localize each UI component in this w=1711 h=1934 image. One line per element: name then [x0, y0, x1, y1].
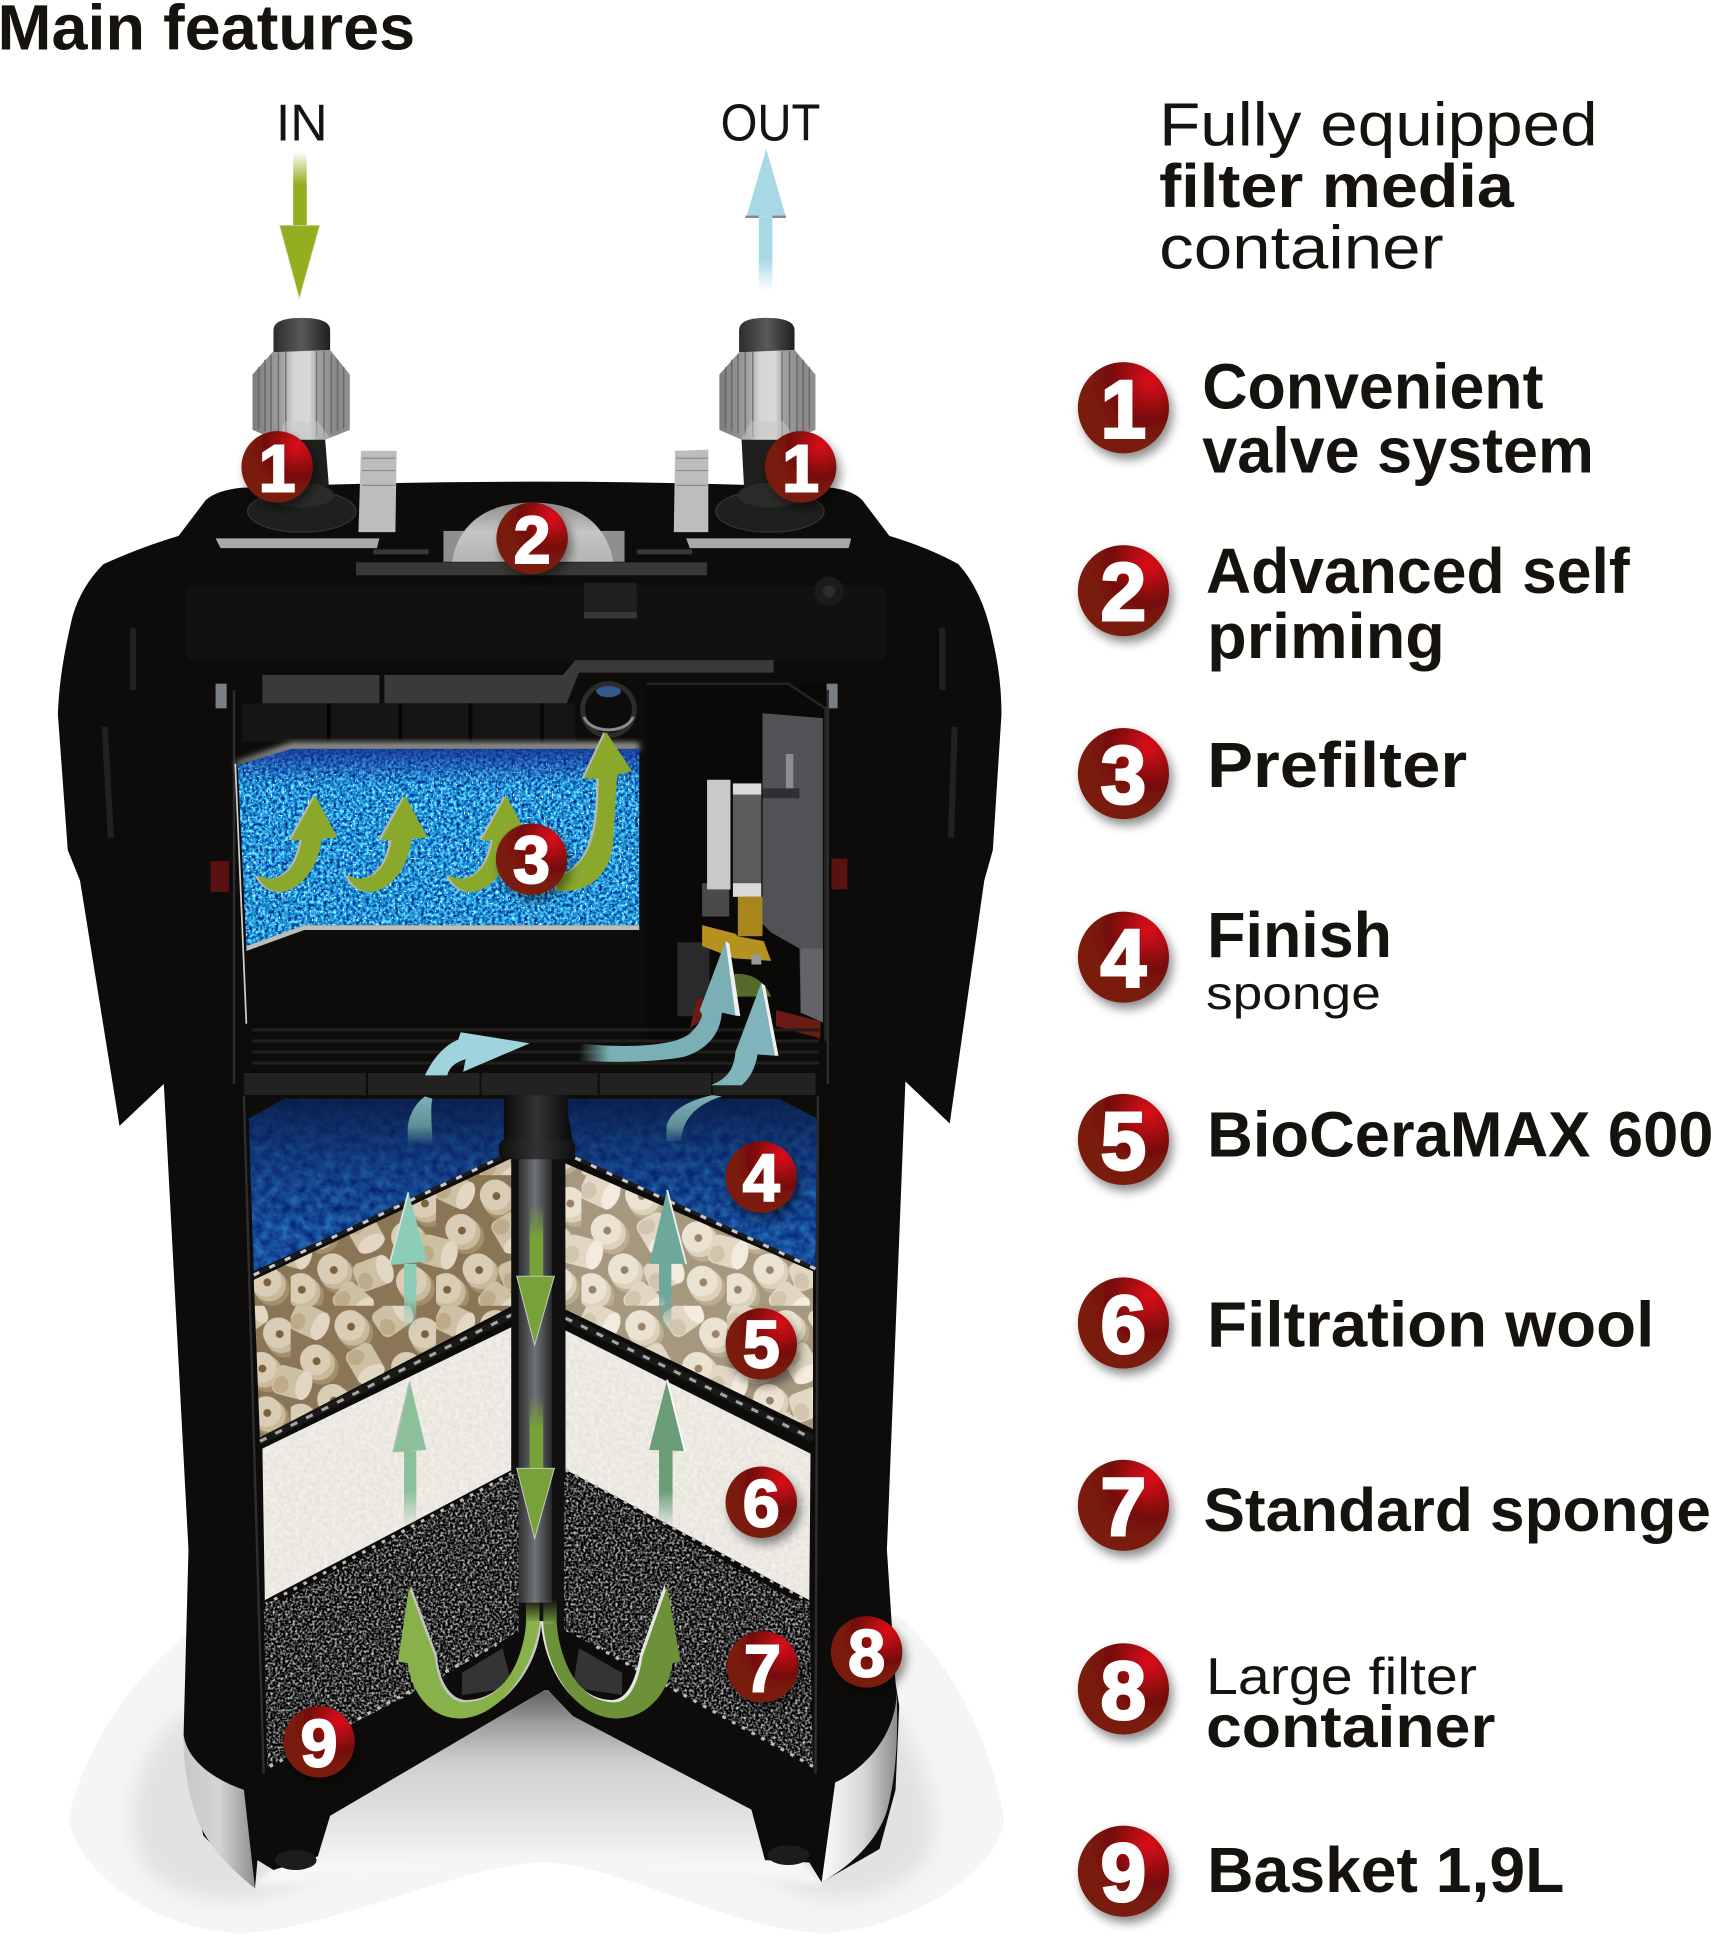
arrow: water out — [745, 149, 786, 291]
legend item 4: Finish sponge — [1078, 899, 1392, 1019]
legend item 2: Advanced self priming: Advanced self — [1206, 535, 1630, 607]
legend item 2: Advanced self priming: priming — [1207, 600, 1445, 672]
badge: 4 finish sponge: 4 — [743, 1142, 780, 1216]
badge: 8 large container — [831, 1616, 902, 1692]
panel: BioCeraMAX ceramic rings — [254, 1155, 815, 1438]
panel: finish sponge — [246, 1096, 820, 1275]
wheel: right — [767, 1845, 809, 1865]
panel: filter body housing — [58, 482, 1001, 1888]
legend item 1: Convenient valve system — [1078, 350, 1594, 486]
badge: 2 self priming — [496, 503, 568, 578]
arrow: wool left — [393, 1381, 426, 1527]
legend item 2: Advanced self priming — [1078, 535, 1630, 672]
heading: Fully equipped filter media container — [1159, 90, 1598, 283]
arrow: prefilter flow 3 — [446, 796, 528, 892]
legend item 8: Large filter container: container — [1206, 1693, 1495, 1760]
legend item 6: Filtration wool — [1078, 1277, 1654, 1371]
icon: left red clip — [211, 861, 229, 892]
badge: 3 prefilter — [496, 823, 567, 898]
badge: 2 self priming: 2 — [514, 504, 551, 578]
heading: Fully equipped filter media container: container — [1159, 214, 1444, 283]
badge: 1 right valve — [765, 431, 836, 507]
label: IN: IN — [276, 93, 328, 151]
legend item 3: Prefilter: 3 — [1101, 730, 1146, 821]
label: OUT: OUT — [721, 93, 820, 151]
legend item 1: Convenient valve system: valve system — [1202, 414, 1594, 486]
arrow: blue flow to pump 1 — [579, 941, 740, 1062]
arrow: wool right — [649, 1380, 685, 1527]
legend item 1: Convenient valve system: 1 — [1101, 364, 1146, 455]
badge: 7 standard sponge — [727, 1631, 798, 1706]
arrow: U-turn right — [541, 1584, 681, 1718]
panel: upper interior plate — [243, 660, 774, 742]
arrow: blue flow to pump 2 — [666, 983, 779, 1141]
badge: 1 right valve: 1 — [782, 433, 819, 507]
legend item 8: Large filter container — [1078, 1643, 1495, 1760]
legend item 7: Standard sponge: 7 — [1101, 1462, 1146, 1553]
badge: 7 standard sponge: 7 — [744, 1632, 781, 1706]
badge: 6 wool: 6 — [743, 1467, 780, 1541]
legend item 4: Finish sponge: 4 — [1101, 914, 1146, 1005]
panel: central tube — [499, 1095, 575, 1632]
arrow: prefilter flow 1 — [255, 796, 338, 892]
heading: Fully equipped filter media container: filter media — [1159, 152, 1515, 221]
legend item 2: Advanced self priming: 2 — [1101, 547, 1146, 638]
legend item 8: Large filter container: Large filter — [1206, 1647, 1477, 1705]
icon: right valve — [716, 318, 824, 532]
legend item 9: Basket 1,9L — [1078, 1826, 1564, 1919]
legend item 6: Filtration wool: Filtration wool — [1207, 1288, 1654, 1360]
panel: pump compartment — [647, 684, 827, 1041]
arrow: central tube down lower — [517, 1396, 554, 1539]
badge: 5 ceramic — [726, 1308, 797, 1382]
legend item 6: Filtration wool: 6 — [1101, 1280, 1146, 1371]
badge: 9 basket — [283, 1706, 355, 1781]
legend item 5: BioCeraMAX 600: BioCeraMAX 600 — [1207, 1099, 1711, 1171]
badge: 9 basket: 9 — [301, 1707, 338, 1781]
wheel: left — [275, 1850, 317, 1870]
legend item 7: Standard sponge: Standard sponge — [1203, 1476, 1711, 1545]
icon: left valve — [248, 318, 356, 532]
badge: 1 left valve — [241, 431, 313, 507]
panel: grate band — [244, 1030, 819, 1095]
arrow: prefilter flow 4 — [554, 732, 632, 891]
legend item 1: Convenient valve system: Convenient — [1202, 350, 1543, 422]
legend item 3: Prefilter — [1078, 728, 1467, 821]
legend item 5: BioCeraMAX 600: 5 — [1101, 1096, 1146, 1187]
arrow: prefilter flow 2 — [345, 796, 427, 892]
foot: left silver foot — [184, 1734, 255, 1888]
arrow: water in — [280, 152, 320, 298]
arrow: central tube down upper — [517, 1205, 554, 1345]
panel: cap details — [105, 503, 955, 1774]
badge: 1 left valve: 1 — [259, 433, 296, 507]
badge: 4 finish sponge — [726, 1141, 797, 1216]
panel: prefilter blue sponge — [234, 743, 643, 1024]
legend item 7: Standard sponge — [1078, 1460, 1711, 1553]
badge: 3 prefilter: 3 — [513, 824, 550, 898]
icon: left lever — [358, 451, 397, 532]
legend item 4: Finish sponge: Finish — [1207, 899, 1392, 971]
panel: filtration wool — [259, 1313, 814, 1603]
arrow: ceramic right — [649, 1190, 686, 1333]
icon: right red clip — [831, 859, 847, 889]
legend item 9: Basket 1,9L: 9 — [1101, 1828, 1146, 1919]
icon: round inlet valve — [583, 684, 634, 735]
badge: 8 large container: 8 — [848, 1618, 885, 1692]
panel: standard sponge — [261, 1466, 815, 1770]
heading: Fully equipped filter media container: Fully equipped — [1159, 90, 1598, 159]
legend item 8: Large filter container: 8 — [1101, 1645, 1146, 1736]
foot: right silver foot — [822, 1690, 897, 1882]
arrow: U-turn left — [398, 1585, 541, 1718]
legend item 9: Basket 1,9L: Basket 1,9L — [1207, 1834, 1564, 1906]
badge: 5 ceramic: 5 — [743, 1308, 780, 1382]
panel: floor shadow — [69, 1616, 1004, 1933]
badge: 6 wool — [726, 1467, 797, 1541]
legend item 5: BioCeraMAX 600 — [1078, 1094, 1711, 1187]
legend item 3: Prefilter: Prefilter — [1207, 729, 1467, 801]
arrow: ceramic left — [389, 1192, 427, 1333]
arrow: blue flow centre — [408, 1032, 530, 1146]
icon: right lever — [674, 450, 708, 532]
legend item 4: Finish sponge: sponge — [1206, 967, 1381, 1019]
